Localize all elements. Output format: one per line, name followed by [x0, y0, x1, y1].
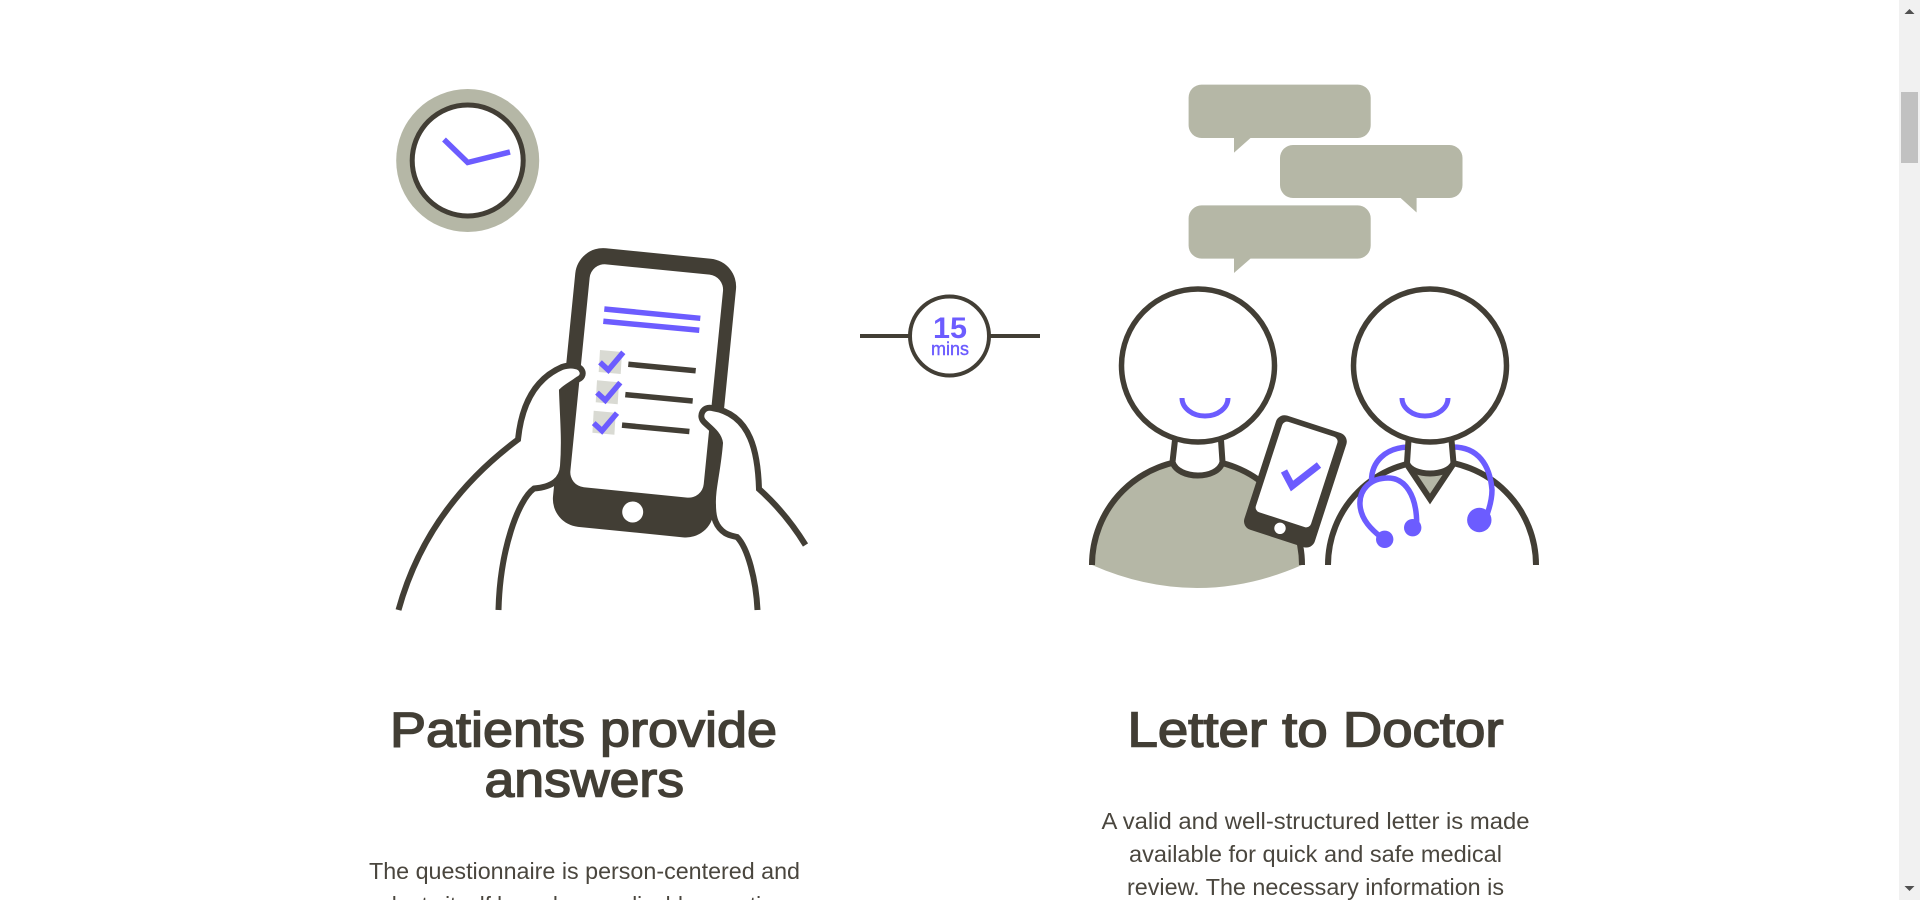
phone body: [550, 245, 739, 540]
right hand: [701, 408, 806, 610]
browser scrollbar: [1899, 0, 1920, 900]
text block: letter description: review. The necessary information is: [1127, 874, 1504, 900]
doctor collar: [1408, 466, 1452, 499]
doctor neck: [1407, 440, 1454, 474]
phone home button: [622, 502, 643, 522]
illustration: hands holding phone with questionnaire: [398, 245, 806, 610]
heading: patients provide answers: [390, 704, 777, 808]
left hand: [398, 365, 583, 610]
patient phone: [1242, 413, 1349, 550]
text block: letter description: A valid and well-structured letter is made: [1102, 808, 1530, 834]
stethoscope: [1360, 447, 1492, 538]
questionnaire title lines: [603, 309, 700, 330]
checklist rows: [592, 350, 696, 435]
doctor smile: [1402, 398, 1448, 416]
patient shirt: [1092, 460, 1302, 588]
heading: letter to doctor: Letter to Doctor: [1128, 704, 1504, 758]
doctor coat: [1328, 461, 1536, 565]
connector: 15 mins: [860, 296, 1040, 376]
text block: questionnaire description: [369, 858, 800, 900]
doctor head: [1354, 289, 1506, 442]
connector: 15 mins: mins: [931, 339, 969, 359]
heading: patients provide answers: Patients provide: [390, 704, 777, 758]
patient head: [1122, 289, 1274, 442]
text block: questionnaire description: The questionnaire is person-centered and: [369, 858, 800, 884]
text block: letter description: [1102, 808, 1530, 900]
speech bubbles: [1189, 85, 1462, 273]
icon: clock: [396, 89, 539, 232]
text block: letter description: available for quick and safe medical: [1129, 841, 1502, 867]
connector: 15 mins: 15: [933, 312, 967, 345]
phone screen: [569, 263, 724, 499]
patient smile: [1182, 398, 1228, 416]
patient neck: [1172, 440, 1222, 476]
illustration: patient: [1092, 289, 1349, 588]
illustration: doctor: [1328, 289, 1536, 565]
heading: patients provide answers: answers: [484, 754, 684, 808]
